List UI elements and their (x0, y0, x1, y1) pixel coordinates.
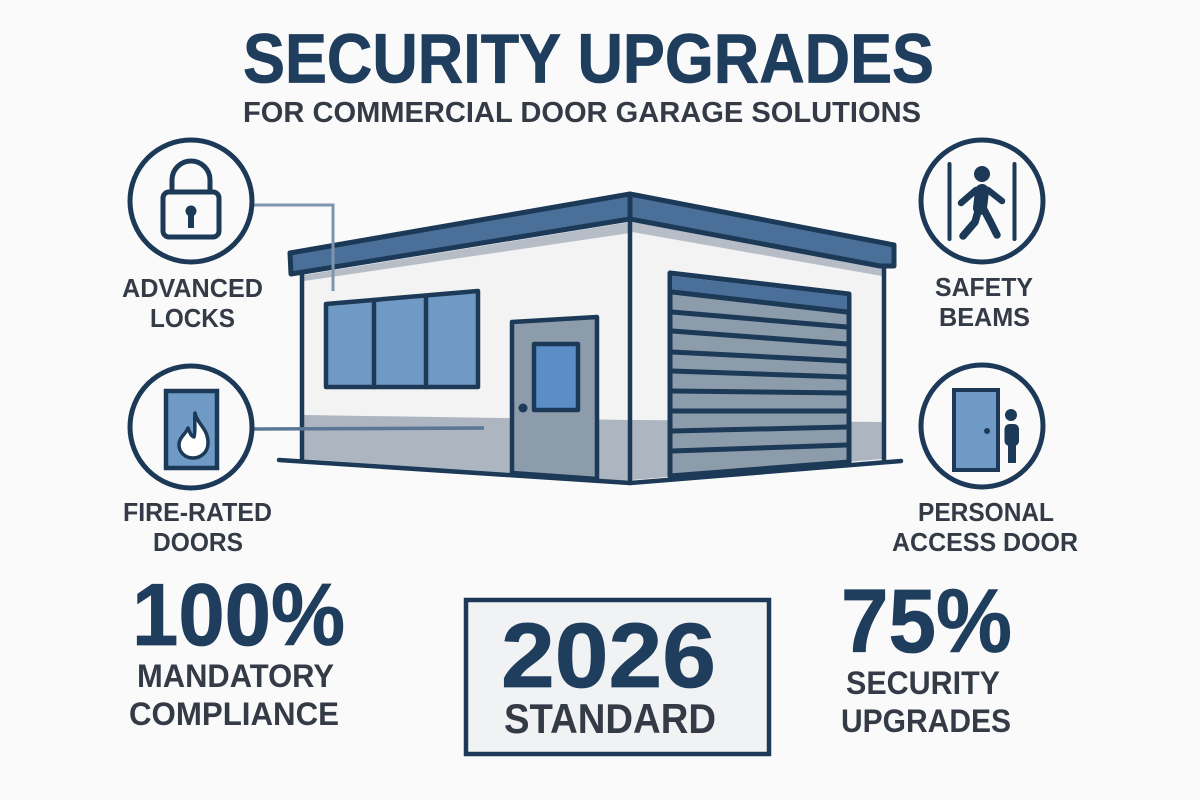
stat: 75% security upgrades (841, 572, 1012, 739)
stat: 100% mandatory compliance: 100% (132, 565, 345, 664)
label: advanced locks: LOCKS (150, 303, 235, 333)
stat: 100% mandatory compliance: MANDATORY (137, 658, 334, 694)
label: safety beams (935, 272, 1033, 332)
icon: personal access door (921, 365, 1043, 487)
wall shadows under roof (304, 222, 630, 281)
left wall (302, 218, 630, 483)
label: fire-rated doors (123, 497, 272, 557)
callout: 2026 standard: STANDARD (504, 695, 716, 742)
label: personal access door: ACCESS DOOR (892, 527, 1078, 557)
label: personal access door: PERSONAL (918, 497, 1054, 527)
stat: 100% mandatory compliance (129, 565, 345, 732)
leader line: locks to wall (254, 205, 333, 291)
label: personal access door (892, 497, 1078, 557)
window (326, 291, 478, 387)
callout: 2026 standard: 2026 (501, 605, 716, 707)
label: advanced locks (122, 273, 263, 333)
label: fire-rated doors: FIRE-RATED (123, 497, 272, 527)
stat: 75% security upgrades: SECURITY (846, 665, 1000, 701)
label: safety beams: SAFETY (935, 272, 1033, 302)
subtitle: FOR COMMERCIAL DOOR GARAGE SOLUTIONS (243, 97, 921, 129)
label: safety beams: BEAMS (939, 302, 1030, 332)
title: SECURITY UPGRADES (243, 20, 934, 98)
icon: padlock (130, 140, 252, 262)
stat: 75% security upgrades: 75% (841, 572, 1012, 672)
stat: 75% security upgrades: UPGRADES (841, 703, 1011, 739)
building illustration (279, 194, 901, 483)
stat: 100% mandatory compliance: COMPLIANCE (129, 696, 339, 732)
label: advanced locks: ADVANCED (122, 273, 263, 303)
icon: fire-rated door (130, 366, 252, 488)
icon: safety beams (921, 140, 1043, 262)
wall edges and ground line (279, 218, 901, 483)
wall base band (304, 415, 882, 482)
personnel door (512, 317, 597, 479)
roll-up garage door (670, 273, 849, 476)
callout: 2026 standard (466, 600, 769, 754)
label: fire-rated doors: DOORS (153, 527, 243, 557)
leader line: fire door to wall (254, 428, 484, 429)
right wall (630, 218, 884, 483)
roof (290, 194, 894, 274)
